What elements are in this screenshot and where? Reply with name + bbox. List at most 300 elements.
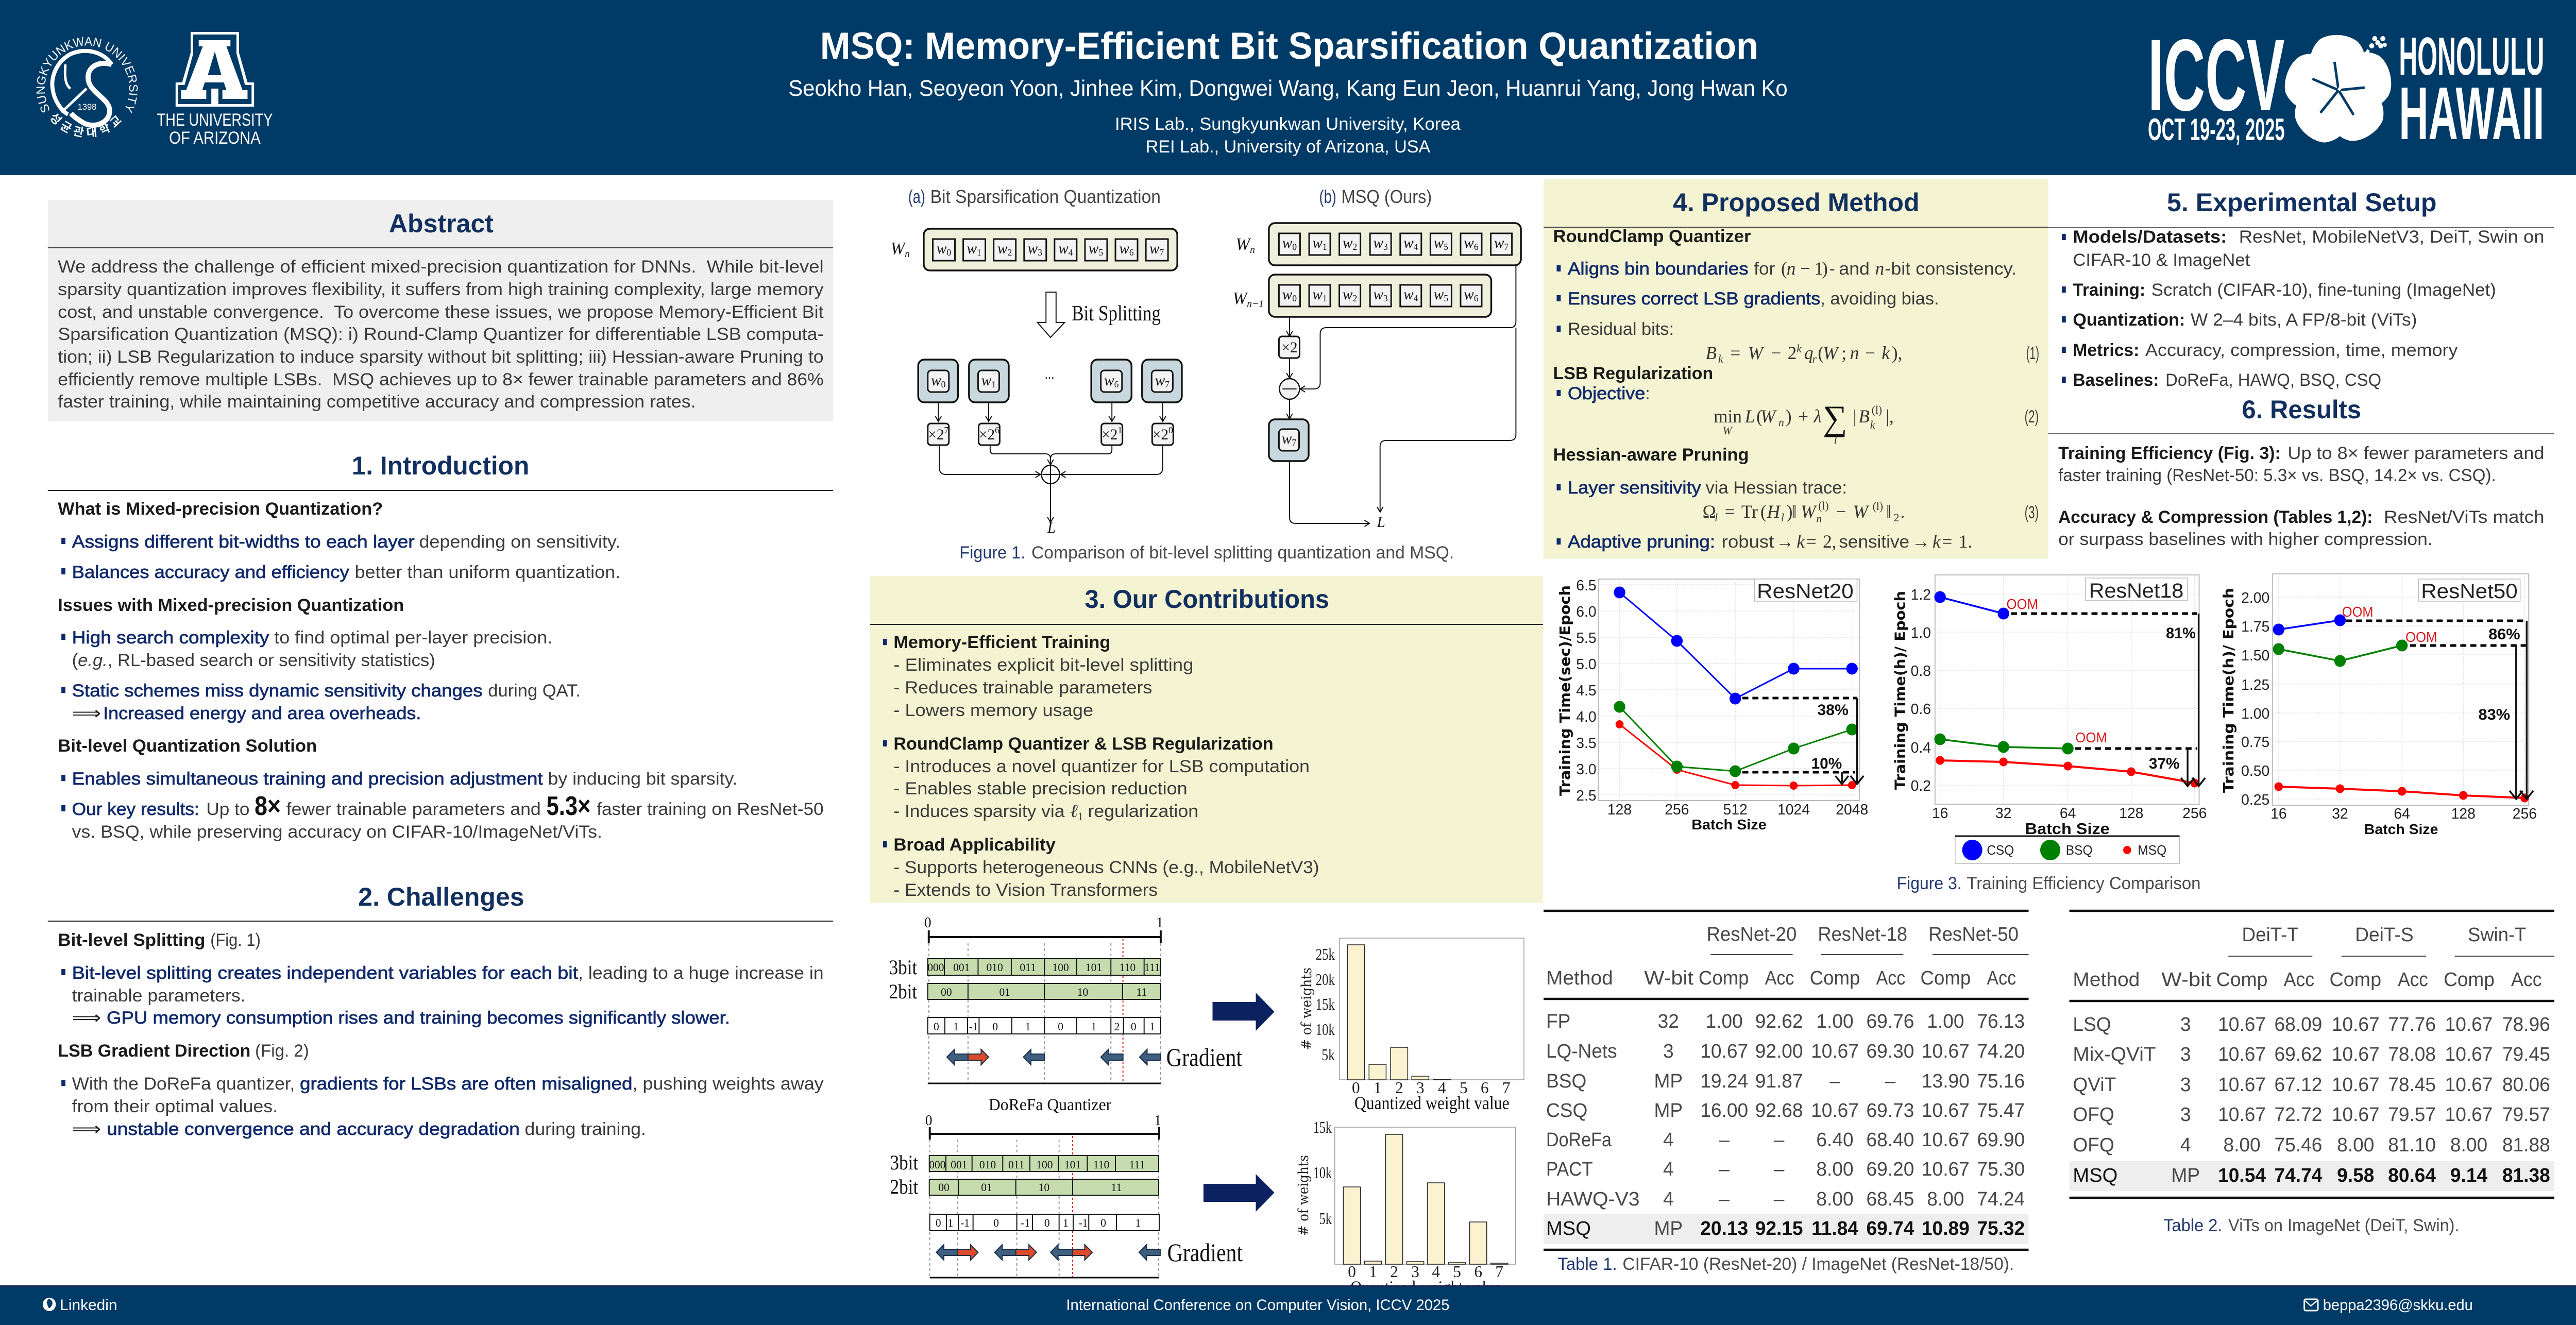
table 1 rows: 75.47 bbox=[1977, 1099, 2025, 1121]
chart: ResNet50: 1.25 bbox=[2241, 677, 2269, 693]
text block: RoundClamp quantizer: RoundClamp Quantizer bbox=[1553, 227, 1751, 246]
logo: University of Arizona: THE UNIVERSITY bbox=[157, 111, 273, 130]
text block: adaptive pruning: k bbox=[1933, 531, 1941, 552]
contact: email: beppa2396@skku.edu bbox=[2323, 1297, 2473, 1314]
table 1 rows: MP bbox=[1654, 1217, 1683, 1239]
table 1 rows: 4 bbox=[1663, 1129, 1674, 1150]
figure 2: DoReFa quantizer vs. RoundClamp, gradients and histograms bbox=[889, 914, 1524, 1298]
chart: ResNet20: 3.0 bbox=[1576, 761, 1597, 778]
chart: ResNet18: Training Time(h)/ Epoch bbox=[1892, 591, 1908, 790]
chart: top histogram: 7 bbox=[1502, 1079, 1511, 1097]
text block: broad applicability: Broad Applicability bbox=[893, 836, 1056, 855]
chart: ResNet20: 38% bbox=[1817, 702, 1849, 719]
equation 2: W bbox=[1760, 406, 1777, 427]
table 1 rows: 11.84 bbox=[1811, 1217, 1858, 1239]
table 2 rows: 10.67 bbox=[2332, 1013, 2380, 1035]
list: setup items: Baselines: bbox=[2073, 371, 2159, 390]
chart: bottom histogram: 10k bbox=[1313, 1164, 1332, 1182]
caption: table 1: Table 1. bbox=[1557, 1255, 1617, 1274]
text block: abstract body: efficiently remove multiple LSBs. MSQ achieves up to 8× fewer trainable parameters and 86% bbox=[58, 370, 824, 389]
equation 1: B bbox=[1706, 343, 1717, 363]
chart: top histogram: 25k bbox=[1316, 945, 1335, 963]
equation 1: k bbox=[1718, 353, 1723, 365]
chart: ResNet20: 6.5 bbox=[1576, 577, 1597, 594]
equation 2: W bbox=[1723, 424, 1733, 437]
table 1 rows: 75.32 bbox=[1977, 1217, 2025, 1239]
diagram: (b) MSQ ours: (b) bbox=[1319, 186, 1336, 207]
text block: what is mixed-precision quantization bbox=[58, 500, 620, 582]
text block: what is mixed-precision quantization: Balances accuracy and efficiency bbox=[72, 563, 349, 582]
diagram: (b) MSQ ours: w bbox=[1374, 286, 1383, 303]
table 2 rows: 8.00 bbox=[2223, 1134, 2261, 1156]
chart: ResNet50: 0.25 bbox=[2241, 792, 2269, 808]
diagram: top quantizer bins: 0 bbox=[934, 1021, 939, 1033]
text block: memory-efficient training: Memory-Efficient Training bbox=[893, 633, 1110, 652]
diagram: (a) bit sparsification quantization: 0 bbox=[946, 247, 951, 258]
text block: adaptive pruning: 2, bbox=[1823, 531, 1836, 552]
diagram: (a) bit sparsification quantization: 7 bbox=[944, 425, 948, 435]
equation 2: + bbox=[1798, 406, 1808, 427]
text block: memory-efficient training bbox=[883, 633, 1193, 720]
diagram: (b) MSQ ours: 7 bbox=[1292, 437, 1296, 448]
list: setup items: Quantization: bbox=[2073, 311, 2185, 330]
chart: bottom histogram: 4 bbox=[1432, 1263, 1440, 1281]
footer band bbox=[0, 1285, 2576, 1325]
text block: bit-level splitting: (Fig. 1) bbox=[210, 931, 261, 950]
text block: results summary bbox=[2058, 444, 2544, 549]
chart: ResNet18: 1.2 bbox=[1911, 587, 1931, 603]
chart: ResNet20: 3.5 bbox=[1576, 735, 1597, 752]
table 1 rows: – bbox=[1774, 1188, 1785, 1210]
figure 3: training efficiency charts bbox=[1556, 574, 2537, 893]
table 2 rows: QViT bbox=[2073, 1074, 2116, 1095]
diagram: (b) MSQ ours: 0 bbox=[1292, 293, 1297, 303]
diagram: top quantizer bins: 2bit bbox=[889, 980, 917, 1003]
table 1 header: Comp bbox=[1810, 967, 1860, 989]
table 1 rows: MP bbox=[1654, 1099, 1683, 1121]
table 1 rows: 75.30 bbox=[1977, 1158, 2025, 1180]
equation 1: ), bbox=[1892, 343, 1902, 363]
table 1 rows: 92.68 bbox=[1755, 1099, 1803, 1121]
table 1 rows: – bbox=[1774, 1158, 1785, 1180]
heading: experimental setup: 5. Experimental Setup bbox=[2167, 188, 2436, 217]
text block: what is mixed-precision quantization: What is Mixed-precision Quantization? bbox=[58, 500, 383, 519]
chart: top histogram: 1 bbox=[1374, 1079, 1382, 1097]
chart: top histogram: 5k bbox=[1321, 1046, 1335, 1064]
chart: ResNet18: 16 bbox=[1932, 805, 1948, 822]
logo: University of Arizona bbox=[157, 32, 273, 148]
table 1 rows: 10.67 bbox=[1922, 1129, 1970, 1150]
chart: ResNet20: 1024 bbox=[1777, 802, 1810, 818]
panel: 3. Our Contributions bbox=[870, 576, 1543, 903]
diagram: (a) bit sparsification quantization: 1 bbox=[1117, 425, 1122, 435]
chart: bottom histogram bbox=[1295, 1118, 1515, 1298]
chart: top histogram: 5 bbox=[1460, 1079, 1468, 1097]
table 1 rows: 1.00 bbox=[1927, 1010, 1964, 1032]
diagram: top quantizer bins: 2 bbox=[1114, 1021, 1120, 1033]
table 1 rows: 69.90 bbox=[1977, 1129, 2025, 1150]
text block: RoundClamp quantizer: for bbox=[1754, 260, 1775, 279]
list: setup items: Accuracy, compression, time, memory bbox=[2145, 341, 2458, 360]
table 1 header: Acc bbox=[1876, 967, 1905, 989]
text block: abstract body: faster training, while maintaining competitive accuracy and compression rates. bbox=[58, 393, 696, 412]
table 2 rows: 78.96 bbox=[2502, 1013, 2550, 1035]
diagram: top quantizer bins: 10 bbox=[1077, 986, 1088, 998]
text block: adaptive pruning: = bbox=[1942, 531, 1952, 552]
chart: ResNet50: OOM bbox=[2342, 604, 2373, 620]
table 2 rows: 10.67 bbox=[2332, 1074, 2380, 1095]
logo: University of Arizona: OF ARIZONA bbox=[169, 129, 261, 148]
text block: LSB gradient direction: , pushing weights away bbox=[633, 1075, 824, 1094]
footer: conference name: International Conference on Computer Vision, ICCV 2025 bbox=[1066, 1297, 1449, 1314]
text block: bit-level quantization solution: 5.3× bbox=[547, 790, 590, 821]
equation 2: l bbox=[1834, 434, 1837, 447]
table 1 rows: – bbox=[1719, 1158, 1730, 1180]
text block: RoundClamp quantizer and LSB regularization: regularization bbox=[1088, 802, 1198, 821]
table 1 rows: 69.76 bbox=[1867, 1010, 1914, 1032]
text block: bit-level splitting bbox=[58, 931, 824, 1028]
panel: abstract bbox=[48, 200, 833, 421]
text block: results summary: ResNet/ViTs match bbox=[2384, 508, 2544, 527]
chart: ResNet20: 256 bbox=[1665, 802, 1689, 818]
diagram: bottom quantizer bins: Gradient bbox=[1167, 1238, 1243, 1267]
equation 2: k bbox=[1870, 419, 1875, 431]
table 2 rows: 77.76 bbox=[2388, 1013, 2436, 1035]
equation 1: − bbox=[1865, 343, 1875, 363]
diagram: bottom quantizer bins: 00 bbox=[938, 1181, 950, 1194]
table 1 rows: 4 bbox=[1663, 1188, 1674, 1210]
chart: ResNet50: 1.50 bbox=[2241, 648, 2269, 664]
equation 1: k bbox=[1797, 343, 1802, 355]
text block: adaptive pruning: 1. bbox=[1959, 531, 1972, 552]
table 2 rows: OFQ bbox=[2073, 1103, 2114, 1125]
text block: issues with mixed-precision quantization: to find optimal per-layer precision. bbox=[274, 628, 552, 648]
text block: issues with mixed-precision quantization: ⟹ bbox=[72, 703, 101, 723]
diagram: bottom quantizer bins: 011 bbox=[1008, 1159, 1024, 1171]
diagram: top quantizer bins: 100 bbox=[1052, 961, 1069, 974]
text block: bit-level splitting: trainable parameters. bbox=[72, 987, 246, 1006]
text block: LSB regularization bbox=[1553, 364, 1713, 403]
text block: RoundClamp quantizer and LSB regularization: ℓ bbox=[1070, 801, 1078, 821]
diagram: bottom quantizer bins: 0 bbox=[993, 1217, 999, 1229]
equation 3: W bbox=[1853, 501, 1870, 522]
diagram: (a) bit sparsification quantization: w bbox=[1028, 241, 1038, 257]
table 2 rows: 3 bbox=[2180, 1103, 2191, 1125]
table 2 rows: 68.09 bbox=[2275, 1013, 2322, 1035]
text block: LSB regularization: : bbox=[1645, 384, 1650, 403]
chart: ResNet50 bbox=[2220, 574, 2537, 837]
text block: results summary: faster training (ResNet-50: 5.3× vs. BSQ, 14.2× vs. CSQ). bbox=[2058, 466, 2496, 485]
diagram: (b) MSQ ours: w bbox=[1282, 235, 1292, 251]
diagram: (b) MSQ ours: MSQ (Ours) bbox=[1342, 186, 1432, 207]
text block: what is mixed-precision quantization: Assigns different bit-widths to each layer bbox=[72, 533, 415, 552]
chart: bottom histogram: 7 bbox=[1495, 1263, 1503, 1281]
diagram: (a) bit sparsification quantization: w bbox=[931, 372, 941, 389]
diagram: (a) bit sparsification quantization: w bbox=[1149, 241, 1159, 257]
table 1 header: ResNet-50 bbox=[1928, 923, 2019, 945]
chart: bottom histogram: Quantized weight value bbox=[1350, 1277, 1501, 1298]
list: setup items bbox=[2062, 228, 2544, 390]
diagram: top quantizer bins: 0 bbox=[992, 1021, 998, 1033]
chart: bottom histogram: 5 bbox=[1453, 1263, 1461, 1281]
table 2 rows: 3 bbox=[2180, 1074, 2191, 1095]
legend: CSQ, BSQ, MSQ bbox=[1955, 836, 2179, 863]
text block: bit-level quantization solution: faster training on ResNet-50 bbox=[597, 800, 824, 819]
diagram: top quantizer bins: 111 bbox=[1144, 961, 1160, 974]
text block: abstract body: Sparsification Quantization (MSQ): i) Round-Clamp Quantizer for differentiable LSB computa- bbox=[58, 325, 824, 344]
table 2 rows: 10.67 bbox=[2445, 1013, 2493, 1035]
text block: LSB gradient direction: from their optimal values. bbox=[72, 1097, 278, 1116]
diagram: top quantizer bins: 000 bbox=[927, 961, 944, 974]
table 1 rows: 76.13 bbox=[1977, 1010, 2025, 1032]
diagram: (a) bit sparsification quantization: w bbox=[967, 241, 977, 257]
text block: LSB gradient direction bbox=[58, 1042, 824, 1139]
text block: bit-level quantization solution: Enables simultaneous training and precision adjustment bbox=[72, 770, 543, 789]
diagram: top quantizer bins: 010 bbox=[987, 961, 1003, 974]
chart: ResNet18: 0.8 bbox=[1911, 663, 1931, 680]
text block: Hessian-aware pruning: Layer sensitivity bbox=[1568, 479, 1701, 498]
text block: bit-level quantization solution: Our key results: bbox=[72, 800, 199, 819]
table 1 rows: 8.00 bbox=[1927, 1188, 1964, 1210]
equation 3: Tr bbox=[1741, 501, 1758, 522]
diagram: bottom quantizer bins: 110 bbox=[1093, 1159, 1110, 1171]
table 1 header: Acc bbox=[1765, 967, 1794, 989]
table 1 rows: MSQ bbox=[1546, 1217, 1591, 1239]
chart: ResNet18 bbox=[1892, 575, 2207, 838]
diagram: (a) bit sparsification quantization: w bbox=[1119, 241, 1129, 257]
diagram: (a) bit sparsification quantization: w bbox=[937, 241, 946, 257]
list: setup items: CIFAR-10 & ImageNet bbox=[2073, 251, 2250, 270]
table 1: CIFAR-10 and ImageNet results bbox=[1544, 911, 2029, 1274]
table 2 rows: 78.08 bbox=[2388, 1043, 2436, 1065]
chart: ResNet50: 86% bbox=[2488, 626, 2520, 643]
table 2 rows: MP bbox=[2171, 1164, 2200, 1186]
table 2 rows: 67.12 bbox=[2275, 1074, 2322, 1095]
table 2 rows: 10.67 bbox=[2218, 1103, 2266, 1125]
text block: bit-level quantization solution bbox=[58, 737, 824, 842]
diagram: (a) bit sparsification quantization: W bbox=[891, 239, 905, 258]
diagram: (a) bit sparsification quantization: w bbox=[1104, 372, 1114, 389]
figure 1: quantization comparison diagram bbox=[891, 186, 1521, 563]
text block: broad applicability: - Extends to Vision Transformers bbox=[893, 881, 1158, 900]
text block: LSB gradient direction: With the DoReFa quantizer, bbox=[72, 1075, 295, 1094]
chart: ResNet18: 256 bbox=[2182, 805, 2207, 822]
diagram: (a) bit sparsification quantization: 7 bbox=[1159, 247, 1164, 258]
table 2 rows: 10.67 bbox=[2332, 1043, 2380, 1065]
diagram: top quantizer bins: 1 bbox=[953, 1021, 959, 1033]
table 2 rows: 10.54 bbox=[2218, 1164, 2266, 1186]
chart: ResNet18: 0.2 bbox=[1911, 778, 1931, 794]
table 2 header bbox=[2073, 924, 2542, 990]
chart: ResNet20: 512 bbox=[1723, 802, 1748, 818]
table 1 header: ResNet-18 bbox=[1818, 923, 1907, 945]
diagram: (b) MSQ ours: w bbox=[1464, 286, 1474, 303]
diagram: bottom quantizer bins: 100 bbox=[1036, 1159, 1053, 1171]
diagram: top quantizer bins: 1 bbox=[1156, 914, 1163, 930]
chart: ResNet50: 0.50 bbox=[2241, 763, 2269, 779]
text block: bit-level quantization solution: vs. BSQ, while preserving accuracy on CIFAR-10/ImageNet/ViTs. bbox=[72, 823, 602, 842]
table 2 rows: 8.00 bbox=[2337, 1134, 2374, 1156]
table 1 rows: 8.00 bbox=[1816, 1158, 1854, 1180]
table 1 rows: HAWQ-V3 bbox=[1546, 1188, 1640, 1210]
diagram: top quantizer bins bbox=[889, 914, 1242, 1083]
diagram: bottom quantizer bins: 11 bbox=[1111, 1181, 1122, 1194]
equation 1: ( bbox=[1818, 343, 1824, 363]
table 1 rows: 10.67 bbox=[1811, 1040, 1859, 1062]
equation 2: | bbox=[1886, 406, 1889, 427]
affiliations: IRIS Lab., Sungkyunkwan University, Korea bbox=[1115, 115, 1461, 134]
chart: ResNet18: 81% bbox=[2166, 625, 2196, 642]
diagram: (b) MSQ ours: W bbox=[1233, 289, 1247, 308]
text block: memory-efficient training: - Reduces trainable parameters bbox=[893, 678, 1152, 698]
chart: ResNet50: 32 bbox=[2332, 806, 2348, 822]
diagram: (a) bit sparsification quantization: 6 bbox=[1129, 247, 1134, 258]
diagram: (a) bit sparsification quantization: Bit Splitting bbox=[1072, 301, 1161, 325]
text block: broad applicability: - Supports heterogeneous CNNs (e.g., MobileNetV3) bbox=[893, 858, 1319, 877]
table 1 header: W-bit bbox=[1644, 967, 1694, 989]
header band bbox=[0, 0, 2576, 175]
diagram: bottom quantizer bins: 0 bbox=[925, 1112, 933, 1128]
table 2 rows: 81.38 bbox=[2502, 1164, 2550, 1186]
text block: RoundClamp quantizer and LSB regularization: 1 bbox=[1078, 810, 1083, 823]
arrow: top to histogram bbox=[1213, 993, 1275, 1031]
diagram: bottom quantizer bins: 1 bbox=[1063, 1217, 1069, 1229]
equation 1: ; bbox=[1841, 343, 1846, 363]
table 1 rows: 3 bbox=[1663, 1040, 1674, 1062]
legend: CSQ, BSQ, MSQ: MSQ bbox=[2138, 843, 2166, 858]
chart: ResNet20: ResNet20 bbox=[1757, 580, 1854, 603]
diagram: bottom quantizer bins: 3bit bbox=[890, 1151, 918, 1174]
chart: ResNet50: 64 bbox=[2394, 806, 2410, 822]
table 2 rows: 10.67 bbox=[2218, 1013, 2266, 1035]
table 1 header bbox=[1546, 923, 2019, 989]
diagram: top quantizer bins: 0 bbox=[1131, 1021, 1137, 1033]
diagram: (b) MSQ ours: w bbox=[1282, 286, 1292, 303]
table 1 rows: FP bbox=[1546, 1010, 1570, 1032]
chart: ResNet50: Batch Size bbox=[2364, 821, 2438, 837]
table 1 rows: 68.40 bbox=[1867, 1129, 1914, 1150]
diagram: (b) MSQ ours: w bbox=[1434, 286, 1444, 303]
table 2 rows: 3 bbox=[2180, 1043, 2191, 1065]
text block: adaptive pruning: Adaptive pruning: bbox=[1568, 533, 1715, 552]
text block: what is mixed-precision quantization: depending on sensitivity. bbox=[419, 533, 620, 552]
equation 3: l bbox=[1715, 512, 1718, 524]
caption: table 1: CIFAR-10 (ResNet-20) / ImageNet (ResNet-18/50). bbox=[1622, 1255, 2014, 1274]
logo: Sungkyunkwan University: 성균관대학교 bbox=[50, 113, 122, 138]
text block: adaptive pruning: k bbox=[1797, 531, 1805, 552]
diagram: bottom quantizer bins: 0 bbox=[1100, 1217, 1106, 1229]
table 1 rows: – bbox=[1774, 1129, 1785, 1150]
panel: 5. Experimental Setup bbox=[2048, 188, 2554, 390]
chart: ResNet18: 0.4 bbox=[1911, 740, 1931, 756]
table 2 header: Acc bbox=[2284, 969, 2314, 990]
diagram: bottom quantizer bins: 2bit bbox=[890, 1176, 918, 1198]
chart: ResNet50: OOM bbox=[2405, 629, 2437, 645]
table 1 rows: MP bbox=[1654, 1070, 1683, 1092]
equation 3: ‖ bbox=[1886, 501, 1891, 522]
table 1 header: Method bbox=[1546, 967, 1613, 989]
text block: RoundClamp quantizer: − bbox=[1800, 258, 1810, 279]
chart: ResNet18: ResNet18 bbox=[2089, 580, 2183, 602]
text block: RoundClamp quantizer: Aligns bin boundaries bbox=[1568, 260, 1749, 279]
diagram: top quantizer bins: 00 bbox=[941, 986, 952, 998]
panel: 1. Introduction bbox=[48, 451, 833, 842]
diagram: top quantizer bins: 3bit bbox=[889, 956, 917, 979]
text block: RoundClamp quantizer and LSB regularization: RoundClamp Quantizer & LSB Regularization bbox=[893, 735, 1274, 754]
text block: issues with mixed-precision quantization: during QAT. bbox=[488, 682, 581, 701]
table 1 header: Comp bbox=[1921, 967, 1971, 989]
text block: LSB gradient direction: gradients for LSBs are often misaligned bbox=[300, 1075, 633, 1094]
logo: ICCV 2025 Honolulu Hawaii bbox=[2148, 19, 2544, 155]
text block: issues with mixed-precision quantization: High search complexity bbox=[72, 628, 269, 648]
diagram: bottom quantizer bins: 111 bbox=[1129, 1159, 1145, 1171]
table 2 rows: 81.88 bbox=[2502, 1134, 2550, 1156]
text block: LSB gradient direction: (Fig. 2) bbox=[255, 1042, 309, 1061]
table 2 rows bbox=[2073, 1013, 2550, 1186]
table 2 rows: LSQ bbox=[2073, 1013, 2111, 1035]
equation 3: Ω bbox=[1703, 501, 1716, 522]
legend: CSQ, BSQ, MSQ: BSQ bbox=[2066, 843, 2093, 858]
table 2 rows: 10.67 bbox=[2445, 1103, 2493, 1125]
chart: ResNet50: ResNet50 bbox=[2421, 580, 2518, 603]
diagram: (a) bit sparsification quantization: ... bbox=[1045, 367, 1055, 382]
diagram: bottom quantizer bins: 010 bbox=[979, 1159, 996, 1171]
chart: ResNet20: 4.5 bbox=[1576, 683, 1597, 699]
diagram: (b) MSQ ours: 4 bbox=[1414, 293, 1418, 303]
diagram: bottom quantizer bins: 10 bbox=[1039, 1181, 1049, 1194]
chart: bottom histogram: 0 bbox=[1348, 1263, 1356, 1281]
diagram: (b) MSQ ours: 1 bbox=[1323, 242, 1327, 252]
logo: ICCV 2025 Honolulu Hawaii: ICCV bbox=[2148, 19, 2285, 132]
table 1 rows: – bbox=[1829, 1070, 1840, 1092]
diagram: bottom quantizer bins: 1 bbox=[947, 1217, 953, 1229]
chart: top histogram: 6 bbox=[1481, 1079, 1489, 1097]
text block: adaptive pruning bbox=[1556, 531, 1972, 552]
equation 3: ) bbox=[1787, 501, 1792, 522]
equation 3: l bbox=[1781, 512, 1784, 524]
diagram: (a) bit sparsification quantization: Bit Sparsification Quantization bbox=[930, 186, 1161, 207]
equation 2: , bbox=[1889, 406, 1894, 427]
table 1 rows: 10.89 bbox=[1922, 1217, 1970, 1239]
table 2 rows: 3 bbox=[2180, 1013, 2191, 1035]
text block: LSB gradient direction: during training. bbox=[525, 1120, 646, 1139]
diagram: top quantizer bins: 1 bbox=[1091, 1021, 1096, 1033]
chart: ResNet20: 6.0 bbox=[1576, 604, 1597, 620]
table 2 rows: MSQ bbox=[2073, 1164, 2117, 1186]
text block: memory-efficient training: - Eliminates explicit bit-level splitting bbox=[893, 656, 1193, 675]
chart: bottom histogram: 3 bbox=[1411, 1263, 1419, 1281]
chart: ResNet20: Batch Size bbox=[1691, 817, 1767, 833]
diagram: (b) MSQ ours: W bbox=[1235, 235, 1250, 254]
chart: ResNet20: 10% bbox=[1811, 755, 1842, 772]
diagram: bottom quantizer bins: 0 bbox=[936, 1217, 941, 1229]
equation 2: ( bbox=[1756, 406, 1762, 427]
diagram: (b) MSQ ours: L bbox=[1377, 514, 1385, 531]
text block: adaptive pruning: → bbox=[1776, 531, 1794, 552]
diagram: (a) bit sparsification quantization: ×2 bbox=[979, 427, 995, 443]
table 1 header: Comp bbox=[1699, 967, 1749, 989]
diagram: top quantizer bins: 01 bbox=[999, 986, 1010, 998]
diagram: (b) MSQ ours: w bbox=[1494, 235, 1504, 251]
table 1 rows: 92.00 bbox=[1755, 1040, 1803, 1062]
text block: Hessian-aware pruning: Hessian-aware Pruning bbox=[1553, 446, 1749, 465]
diagram: (a) bit sparsification quantization: 4 bbox=[1069, 247, 1073, 258]
chart: ResNet20: 4.0 bbox=[1576, 709, 1597, 725]
panel: 4. Proposed Method bbox=[1544, 179, 2048, 559]
caption: figure 3: Figure 3. bbox=[1897, 874, 1962, 893]
table 1 rows: 10.67 bbox=[1922, 1040, 1970, 1062]
diagram: top quantizer bins: 11 bbox=[1136, 986, 1147, 998]
